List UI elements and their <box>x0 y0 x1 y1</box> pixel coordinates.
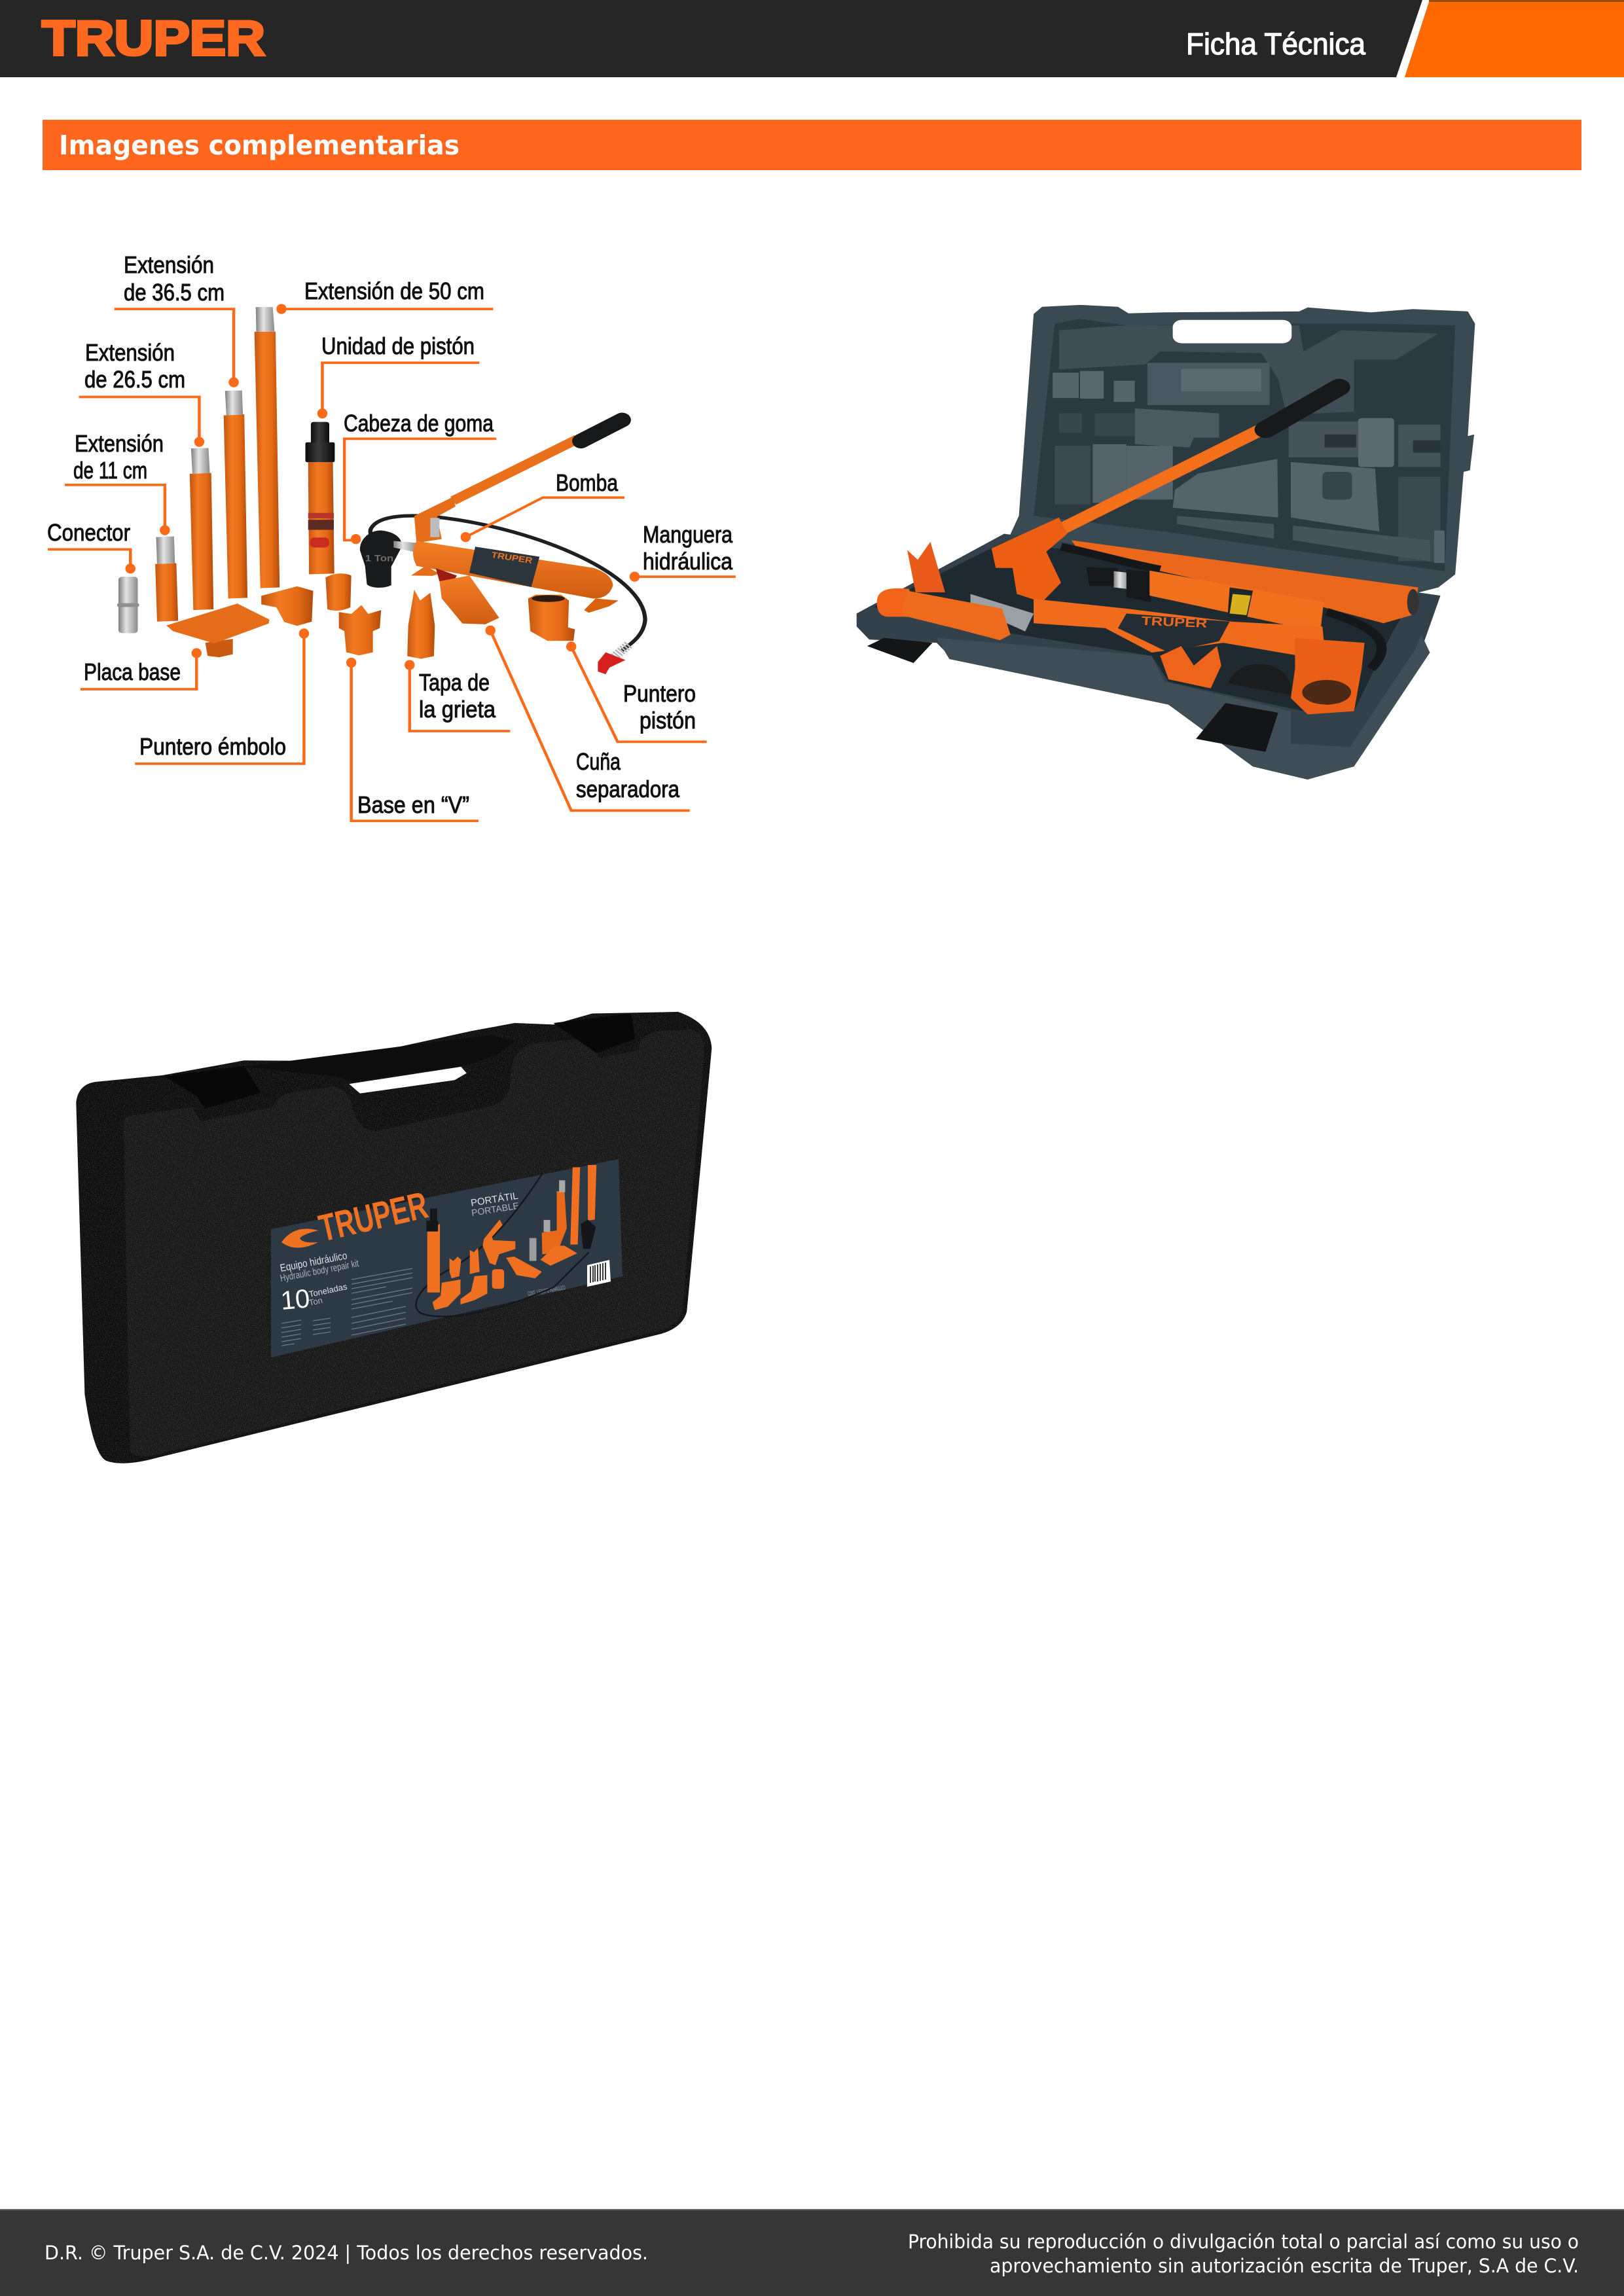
part labels: Extensión <box>75 430 164 457</box>
rubber head <box>1227 664 1291 695</box>
label portable tag <box>470 1191 520 1218</box>
V base <box>1160 646 1221 689</box>
footer bar <box>0 2209 1624 2296</box>
case body <box>76 1012 712 1463</box>
part labels: Cabeza de goma <box>344 410 494 437</box>
extension 26.5 cm <box>190 448 213 610</box>
label small print <box>281 1268 412 1346</box>
handle <box>244 1035 514 1082</box>
header slash accent <box>1396 0 1624 77</box>
extension 50 cm <box>255 307 280 588</box>
rubber head <box>360 531 402 588</box>
part labels: hidráulica <box>643 548 733 575</box>
part labels: Manguera <box>643 521 733 548</box>
part labels: la grieta <box>419 696 496 723</box>
parts illustration <box>48 304 736 821</box>
photo: open case with kit <box>857 305 1475 780</box>
part labels: pistón <box>640 707 696 734</box>
part labels: de 11 cm <box>73 457 147 484</box>
header bar <box>0 0 1624 77</box>
case texture <box>76 1012 712 1463</box>
label title: Equipo hidráulico <box>280 1250 348 1274</box>
plunger tip <box>261 586 313 626</box>
label title: 10 <box>280 1284 311 1316</box>
label logo <box>281 1184 432 1250</box>
orange extension tube <box>1072 540 1419 623</box>
product label <box>271 1159 623 1357</box>
label portable tag: PORTABLE <box>471 1200 520 1218</box>
label title: Ton <box>308 1295 323 1308</box>
label title: Toneladas <box>308 1282 348 1299</box>
piston tip <box>1291 638 1365 715</box>
wedge spreader <box>436 568 499 624</box>
label portable tag: PORTÁTIL <box>470 1191 519 1209</box>
part labels: Placa base <box>84 658 181 685</box>
hose <box>370 516 645 651</box>
cylinder piece <box>325 573 352 611</box>
piston unit <box>306 422 334 575</box>
lid moulded tiles <box>1053 325 1445 563</box>
footer: legal note <box>908 2231 1579 2277</box>
section heading: Imagenes complementarias: Imagenes complementarias <box>59 130 460 161</box>
pump with handle: TRUPER <box>1141 613 1208 630</box>
label kit illustration <box>416 1165 596 1316</box>
hydraulic hose <box>1061 547 1382 669</box>
V base <box>339 605 381 655</box>
leader lines <box>48 309 736 821</box>
label logo: TRUPER <box>315 1184 432 1250</box>
footer: legal note: Prohibida su reproducción o divulgación total o parcial así como su uso o <box>908 2231 1579 2253</box>
case lid <box>1008 305 1475 594</box>
part labels: Bomba <box>556 469 619 496</box>
handle opening <box>349 1067 467 1094</box>
rubber head: 1 Ton <box>365 554 393 564</box>
leader dots <box>126 304 640 670</box>
barcode <box>587 1260 611 1287</box>
part labels <box>47 251 733 818</box>
part labels: Unidad de pistón <box>321 332 475 359</box>
part labels: Extensión de 50 cm <box>304 278 484 304</box>
header label: Ficha Técnica: Ficha Técnica <box>1186 27 1365 61</box>
pump with handle <box>971 387 1339 656</box>
part labels: Conector <box>47 519 130 546</box>
label title <box>280 1250 360 1316</box>
product label: CONT.: 1 EQUIPO HIDRÁULICO <box>528 1284 566 1298</box>
latches <box>164 1066 261 1109</box>
part labels: Base en “V” <box>357 791 469 818</box>
photo: closed case <box>76 1012 712 1463</box>
raised front face <box>124 1030 704 1456</box>
crack cap <box>407 590 435 659</box>
piston tip <box>528 595 575 641</box>
case latches <box>867 638 1278 752</box>
pump: TRUPER <box>490 550 533 566</box>
logo: TRUPER: TRUPER <box>42 10 265 65</box>
footer: copyright: D.R. © Truper S.A. de C.V. 2024 | Todos los derechos reservados. <box>45 2242 648 2264</box>
part labels: Extensión <box>85 339 175 366</box>
part labels: Puntero <box>623 680 696 707</box>
orange base plate and fork <box>877 542 1011 640</box>
extension 11 cm <box>155 536 178 622</box>
connector <box>117 577 139 633</box>
part labels: Puntero émbolo <box>139 733 286 760</box>
handle opening <box>1173 320 1291 344</box>
base plate <box>166 603 270 657</box>
extension 36.5 cm <box>224 390 247 599</box>
part labels: Tapa de <box>419 669 490 696</box>
section heading: Imagenes complementarias <box>43 120 1581 170</box>
exploded parts diagram <box>47 251 736 821</box>
piston unit <box>1087 567 1324 632</box>
label title: Hydraulic body repair kit <box>280 1258 360 1284</box>
part labels: de 36.5 cm <box>124 279 225 306</box>
part labels: de 26.5 cm <box>84 366 185 393</box>
part labels: separadora <box>576 776 680 802</box>
case base <box>857 533 1441 780</box>
footer: legal note: aprovechamiento sin autorización escrita de Truper, S.A de C.V. <box>990 2255 1579 2277</box>
part labels: Cuña <box>576 748 621 775</box>
part labels: Extensión <box>124 251 214 278</box>
pump <box>393 420 623 613</box>
